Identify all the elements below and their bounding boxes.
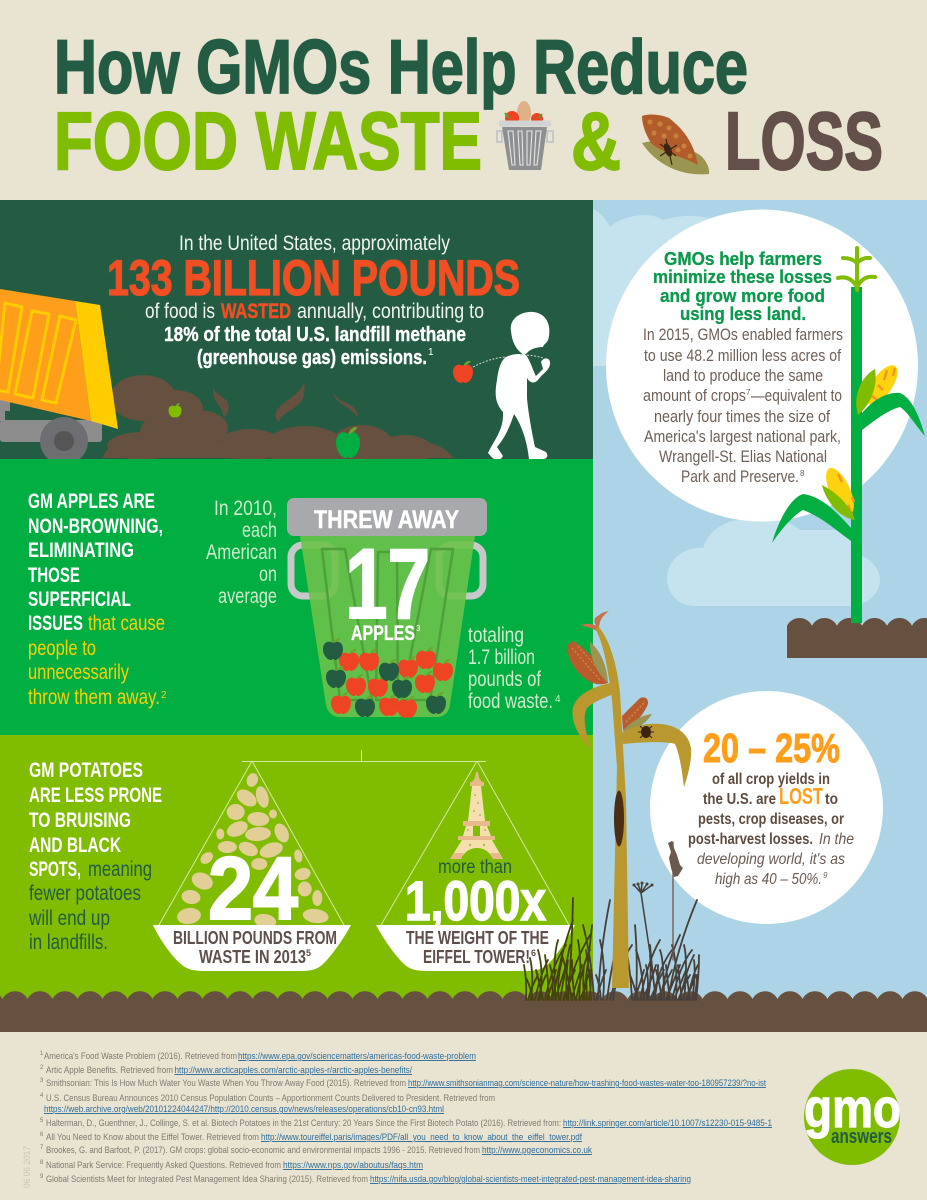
apples label: APPLES bbox=[351, 622, 415, 645]
note 4: 4 bbox=[40, 1093, 44, 1099]
note 3: Smithsonian: This Is How Much Water You Waste When You Throw Away Food (2015). Retrieved from bbox=[46, 1078, 406, 1089]
note 9 bbox=[40, 1174, 691, 1185]
line: greenhouse gas emissions: (greenhouse gas) emissions. bbox=[197, 346, 427, 369]
text: in 2010 each American: American bbox=[206, 541, 277, 564]
apples text block: people to bbox=[28, 637, 96, 660]
note 9: https://nifa.usda.gov/blog/global-scientists-meet-integrated-pest-management-idea-sharing bbox=[370, 1174, 691, 1185]
heading: and grow more food bbox=[660, 285, 825, 306]
text: more than: more than bbox=[438, 857, 512, 878]
italic note: developing world, it's as bbox=[697, 851, 845, 868]
italic note: In the bbox=[819, 831, 854, 848]
text: in 2010 each American: average bbox=[218, 585, 277, 608]
footnote marker 1: 1 bbox=[428, 347, 434, 358]
intro text bbox=[107, 232, 520, 369]
cloud: upper bbox=[593, 209, 745, 366]
note 2: 2 bbox=[40, 1065, 44, 1071]
bucket lid bbox=[287, 498, 487, 536]
left scale pan bbox=[153, 925, 351, 971]
lower husk bbox=[622, 714, 652, 732]
body: —equivalent to bbox=[751, 386, 842, 405]
text: totaling 1.7 billion: 4 bbox=[555, 694, 561, 705]
body: amount of crops bbox=[643, 386, 746, 405]
ground soil bbox=[0, 991, 927, 1032]
lower diseased ear bbox=[622, 697, 648, 730]
apples text block: throw them away. bbox=[28, 686, 160, 709]
line: 18% methane: 18% of the total U.S. landfill methane bbox=[164, 323, 466, 346]
tassel bbox=[580, 611, 609, 632]
upper diseased ear bbox=[568, 641, 608, 684]
GMO benefit text bbox=[643, 248, 843, 486]
soil patch bbox=[787, 618, 927, 658]
apples text block: ELIMINATING bbox=[28, 539, 134, 562]
explanation: the U.S. are bbox=[703, 791, 776, 808]
title bbox=[54, 25, 883, 187]
number 17: 17 bbox=[345, 528, 430, 639]
apples text block: GM APPLES ARE bbox=[28, 490, 155, 513]
beetle pest bbox=[638, 726, 654, 738]
apples text block: SUPERFICIAL bbox=[28, 588, 131, 611]
logo: gmo answers: answers bbox=[831, 1126, 892, 1148]
note 1: 1 bbox=[40, 1051, 44, 1057]
explanation bbox=[688, 771, 844, 848]
circle: GMO benefit callout bbox=[606, 210, 918, 522]
note 2 bbox=[40, 1065, 412, 1076]
heading bbox=[653, 248, 832, 324]
text: totaling 1.7 billion: pounds of bbox=[468, 668, 541, 691]
left scale pan: WASTE IN 2013 bbox=[199, 947, 306, 967]
line: of food is: of food is bbox=[145, 300, 215, 323]
crop loss text bbox=[688, 725, 854, 888]
potatoes text block: will end up bbox=[28, 907, 110, 930]
right scale pan: 6 bbox=[531, 948, 536, 958]
lower corn ear bbox=[820, 464, 860, 518]
upper leaf bbox=[862, 393, 925, 436]
body: land to produce the same bbox=[663, 366, 823, 385]
grass over lime panel bbox=[524, 898, 592, 1000]
dirt pile bbox=[103, 375, 453, 471]
tassel bbox=[838, 248, 875, 290]
text: in 2010 each American bbox=[206, 497, 277, 608]
potatoes text block: GM POTATOES bbox=[29, 759, 143, 782]
apple bucket bbox=[287, 498, 487, 718]
green apple in pile bbox=[336, 427, 360, 458]
title word: FOOD WASTE: FOOD WASTE bbox=[54, 96, 482, 187]
note 1: https://www.epa.gov/sciencematters/americas-food-waste-problem bbox=[238, 1051, 476, 1062]
text: totaling 1.7 billion: totaling bbox=[468, 624, 524, 647]
right leaf bbox=[622, 724, 691, 787]
apples text block bbox=[28, 490, 167, 709]
panel: food waste dark green bbox=[0, 200, 593, 471]
note 8: https://www.nps.gov/aboutus/faqs.htm bbox=[283, 1160, 423, 1171]
text: in 2010 each American: each bbox=[242, 519, 277, 542]
apples text block: unnecessarily bbox=[28, 661, 129, 684]
lower husk bbox=[822, 485, 855, 520]
apples text block: THOSE bbox=[28, 564, 80, 587]
logo: gmo answers: gmo bbox=[804, 1077, 901, 1139]
eiffel tower bbox=[450, 772, 503, 859]
footnote marker 3: 3 bbox=[416, 624, 421, 633]
left scale pan: 5 bbox=[306, 948, 311, 958]
note 3 bbox=[40, 1078, 766, 1089]
note 7: 7 bbox=[40, 1145, 44, 1151]
explanation: LOST bbox=[779, 783, 823, 809]
apples text block: 2 bbox=[161, 690, 167, 701]
explanation: post-harvest losses. bbox=[688, 831, 813, 848]
note 2: http://www.arcticapples.com/arctic-apples-r/arctic-apples-benefits/ bbox=[174, 1065, 412, 1076]
left scale pan: BILLION POUNDS FROM bbox=[173, 928, 337, 948]
potatoes text block: fewer potatoes bbox=[29, 882, 141, 905]
text: totaling 1.7 billion bbox=[468, 624, 561, 713]
text: totaling 1.7 billion: 1.7 billion bbox=[468, 646, 535, 669]
red apple thrown bbox=[453, 361, 473, 383]
note 4 bbox=[40, 1093, 495, 1115]
note 6: 6 bbox=[40, 1132, 44, 1138]
number 1,000x: 1,000x bbox=[405, 869, 546, 932]
stalk bbox=[596, 626, 629, 988]
threw away label: THREW AWAY bbox=[314, 506, 459, 534]
title ampersand: & bbox=[571, 96, 621, 187]
circle: crop losses callout bbox=[650, 691, 883, 924]
body bbox=[643, 325, 843, 486]
stalk bbox=[851, 287, 862, 623]
note 7: Brookes, G. and Barfoot, P. (2017). GM crops: global socio-economic and environmental impacts 1996 - 2015. Retrieved from bbox=[46, 1145, 480, 1156]
italic note: high as 40 – 50%. bbox=[715, 871, 822, 888]
text: in 2010 each American: In 2010, bbox=[214, 497, 277, 520]
note 8: 8 bbox=[40, 1160, 44, 1166]
body: Park and Preserve. bbox=[681, 467, 799, 486]
healthy corn plant bbox=[772, 248, 927, 658]
note 4: https://web.archive.org/web/20101224044247/http://2010.census.gov/news/releases/operations/cb10-cn93.html bbox=[44, 1104, 444, 1115]
small lime apple bbox=[168, 403, 182, 418]
date stamp: 06 06 2017 bbox=[22, 1146, 32, 1188]
note 1: America's Food Waste Problem (2016). Retrieved from bbox=[44, 1051, 237, 1062]
potatoes text block: in landfills. bbox=[29, 931, 108, 954]
note 4: U.S. Census Bureau Announces 2010 Census Population Counts – Apportionment Counts Delivered to President. Retrieved from bbox=[46, 1093, 495, 1104]
icon: trash can with food bbox=[497, 101, 553, 170]
heading: using less land. bbox=[680, 303, 806, 324]
potatoes text block: TO BRUISING bbox=[29, 809, 131, 832]
note 5: 5 bbox=[40, 1118, 44, 1124]
lower leaf bbox=[772, 494, 851, 543]
body: to use 48.2 million less acres of bbox=[644, 346, 841, 365]
big stat: 133 billion pounds: 133 BILLION POUNDS bbox=[107, 250, 520, 306]
note 6 bbox=[40, 1132, 582, 1143]
body: nearly four times the size of bbox=[654, 407, 830, 426]
right scale pan: THE WEIGHT OF THE bbox=[406, 928, 549, 948]
text: in 2010 each American: on bbox=[259, 563, 277, 586]
body: In 2015, GMOs enabled farmers bbox=[643, 325, 843, 344]
footnotes bbox=[40, 1051, 772, 1185]
title line: How GMOs Help Reduce: How GMOs Help Reduce bbox=[54, 25, 748, 110]
upper husk bbox=[856, 369, 876, 415]
dying corn plant bbox=[568, 611, 691, 988]
potatoes text block: meaning bbox=[88, 858, 152, 881]
logo: gmo answers bbox=[804, 1069, 901, 1165]
note 6: All You Need to Know about the Eiffel Tower. Retrieved from bbox=[46, 1132, 259, 1143]
flowering weed bbox=[668, 841, 683, 960]
italic note: 9 bbox=[823, 871, 828, 880]
body: Wrangell-St. Elias National bbox=[659, 447, 827, 466]
note 5: Halterman, D., Guenthner, J., Collinge, S. et al. Biotech Potatoes in the 21st Century: 20 Years Since the First Biotech Potato (2016). Retrieved from: bbox=[46, 1118, 561, 1129]
hanging left leaf bbox=[572, 683, 611, 749]
line: annually contributing to: annually, contributing to bbox=[297, 300, 484, 323]
cloud: lower bbox=[667, 517, 880, 606]
apples text block: that cause bbox=[88, 612, 165, 635]
stat 20-25%: 20 – 25% bbox=[703, 725, 840, 771]
heading: minimize these losses bbox=[653, 266, 832, 287]
dump truck bbox=[0, 289, 118, 465]
note 3: 3 bbox=[40, 1078, 44, 1084]
italic note bbox=[697, 831, 854, 888]
right scale pan: EIFFEL TOWER! bbox=[423, 947, 530, 967]
note 5: http://link.springer.com/article/10.1007/s12230-015-9485-1 bbox=[563, 1118, 772, 1129]
apples text block: ISSUES bbox=[28, 612, 83, 635]
body: 8 bbox=[800, 469, 805, 478]
potatoes text block: ARE LESS PRONE bbox=[29, 784, 162, 807]
note 9: Global Scientists Meet for Integrated Pest Management Idea Sharing (2015). Retrieved from bbox=[46, 1174, 368, 1185]
right scale pan bbox=[376, 925, 575, 971]
text: totaling 1.7 billion: food waste. bbox=[468, 690, 553, 713]
heading: GMOs help farmers bbox=[664, 248, 822, 269]
panel: blue sky bbox=[593, 200, 927, 1032]
weeds and grass bbox=[524, 841, 699, 1000]
potatoes text block: AND BLACK bbox=[29, 834, 121, 857]
upper corn ear bbox=[861, 360, 903, 410]
note 9: 9 bbox=[40, 1174, 44, 1180]
explanation: of all crop yields in bbox=[712, 771, 830, 788]
apples text block: NON-BROWNING, bbox=[28, 515, 163, 538]
panel: apples green bbox=[0, 459, 593, 735]
note 8: National Park Service: Frequently Asked Questions. Retrieved from bbox=[46, 1160, 281, 1171]
umbel weed bbox=[632, 882, 654, 960]
note 6: http://www.toureiffel.paris/images/PDF/all_you_need_to_know_about_the_eiffel_tower.pdf bbox=[261, 1132, 582, 1143]
number 24: 24 bbox=[208, 838, 298, 938]
body: America's largest national park, bbox=[644, 427, 841, 446]
explanation: to bbox=[825, 791, 838, 808]
word: wasted: WASTED bbox=[221, 300, 291, 323]
apple toss trajectory bbox=[473, 355, 543, 367]
note 3: http://www.smithsonianmag.com/science-nature/how-trashing-food-wastes-water-too-180957239/?no-ist bbox=[408, 1078, 766, 1089]
explanation: pests, crop diseases, or bbox=[698, 811, 844, 828]
icon: damaged corn with pest bbox=[642, 115, 709, 174]
potatoes text block: SPOTS, bbox=[29, 858, 81, 881]
panel: potatoes lime bbox=[0, 735, 593, 1006]
note 7: http://www.pgeconomics.co.uk bbox=[482, 1145, 592, 1156]
caterpillar bbox=[614, 790, 624, 846]
body: 7 bbox=[746, 388, 751, 397]
stink wisps bbox=[213, 382, 358, 422]
boy silhouette bbox=[488, 312, 550, 460]
red and green apples bbox=[323, 638, 453, 718]
grass over sky bbox=[583, 900, 699, 1000]
note 2: Artic Apple Benefits. Retrieved from bbox=[46, 1065, 173, 1076]
sentence lead-in: In the United States, approximately bbox=[179, 232, 450, 255]
balance scale bbox=[153, 750, 575, 971]
bucket handles bbox=[291, 545, 483, 596]
potatoes text block bbox=[28, 759, 162, 954]
potato pile bbox=[176, 772, 330, 930]
note 1 bbox=[40, 1051, 476, 1062]
upper husk bbox=[590, 642, 608, 683]
